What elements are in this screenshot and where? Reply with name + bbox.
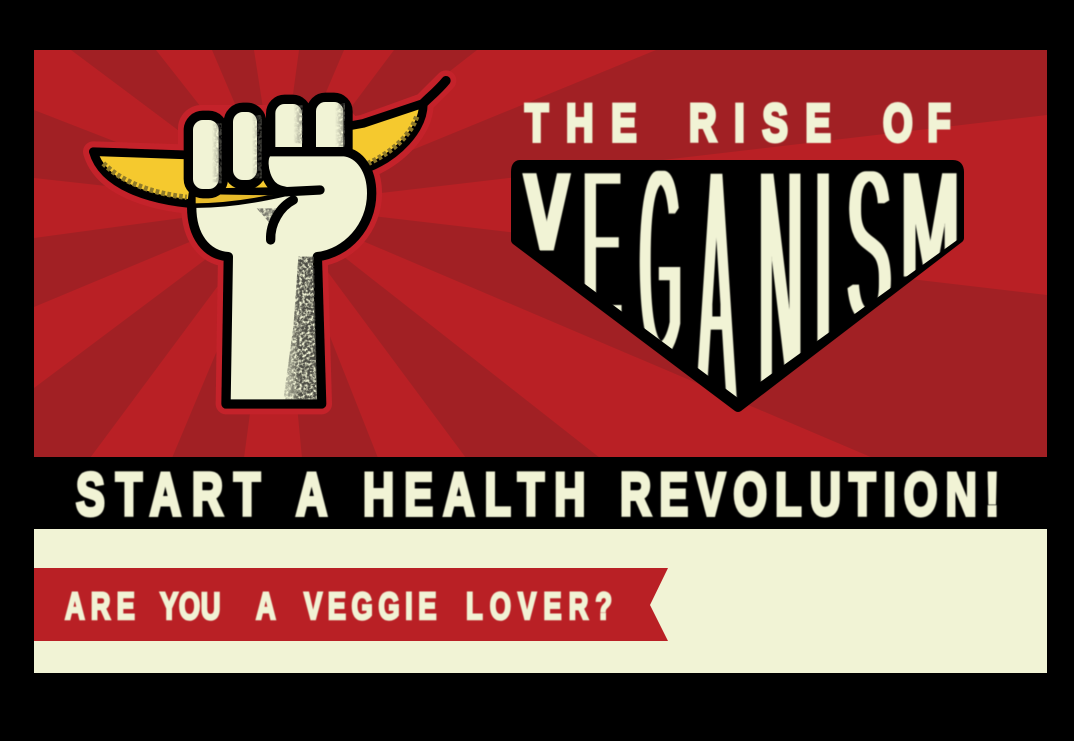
- ribbon: are you a veggie lover: [34, 568, 668, 641]
- finger shading: [212, 103, 345, 183]
- banana: [93, 81, 446, 205]
- title word: A: [698, 94, 735, 479]
- title word: S: [847, 124, 891, 369]
- ribbon text: LOVER?: [466, 586, 612, 628]
- panel: cream lower section: [34, 529, 1047, 673]
- hand and arm: [192, 152, 372, 404]
- title word: G: [640, 111, 681, 415]
- title word: I: [812, 121, 834, 399]
- heading: the rise of: RISE: [689, 93, 831, 152]
- slogan: A: [296, 462, 327, 529]
- thumb crease: [271, 190, 320, 240]
- ribbon text: YOU: [160, 586, 220, 628]
- slogan: HEALTH: [363, 462, 585, 529]
- banner: start a health revolution: [34, 457, 1047, 529]
- title shield: veganism: [511, 160, 964, 412]
- fist glow: [93, 81, 446, 404]
- title word: V: [526, 150, 567, 275]
- panel: red sunburst header: [34, 50, 1047, 458]
- icon: raised fist gripping a banana: [93, 81, 446, 404]
- arm shading: [283, 257, 317, 399]
- ribbon text: VEGGIE: [304, 586, 436, 628]
- ribbon text: A: [256, 586, 276, 628]
- ribbon text: [65, 586, 612, 628]
- title word: N: [759, 105, 802, 462]
- palm shadow: [257, 208, 280, 223]
- banana in grip: [193, 192, 288, 206]
- shield shape: [516, 165, 959, 407]
- heading: the rise of: [525, 93, 951, 152]
- title word: [522, 170, 958, 398]
- fingers one and two: [188, 107, 262, 194]
- slogan: REVOLUTION!: [620, 462, 999, 529]
- title word: E: [583, 126, 621, 365]
- slogan: [76, 462, 999, 529]
- title word: M: [901, 141, 959, 309]
- ribbon text: ARE: [65, 586, 135, 628]
- slogan: START: [76, 462, 260, 529]
- heading: the rise of: OF: [883, 93, 951, 152]
- heading: the rise of: THE: [525, 93, 637, 152]
- fingers three and four: [271, 97, 348, 166]
